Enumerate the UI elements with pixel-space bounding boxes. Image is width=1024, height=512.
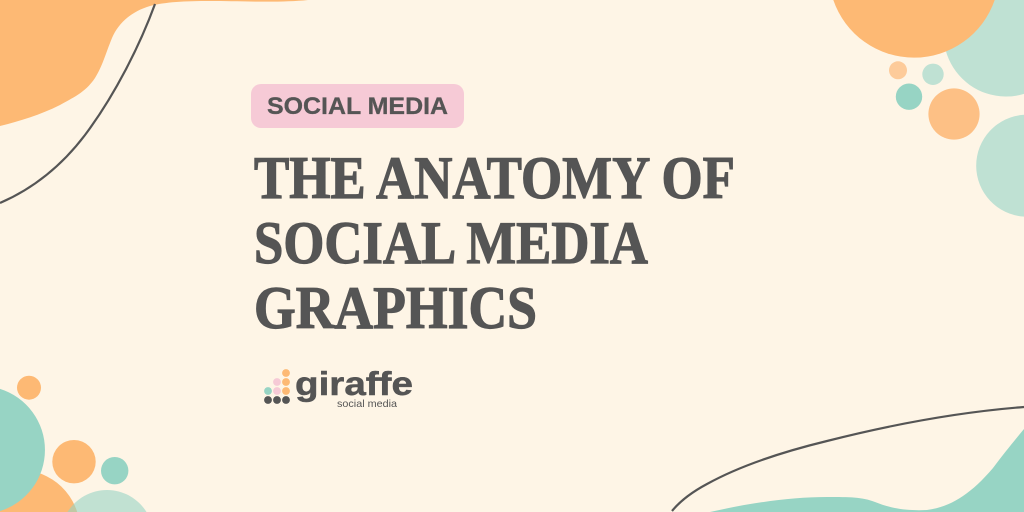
logo tagline: social media xyxy=(337,398,397,410)
bottom-right decoration: teal wave and curve xyxy=(672,407,1024,512)
icon: logo dots xyxy=(264,369,290,404)
title: THE ANATOMY OF xyxy=(254,145,735,211)
title xyxy=(254,145,735,341)
logo: giraffe social media xyxy=(264,365,413,410)
logo wordmark: giraffe xyxy=(295,365,413,402)
title: SOCIAL MEDIA xyxy=(254,210,648,276)
top-right decoration: circles xyxy=(833,0,1024,217)
category tag: social media xyxy=(251,84,464,128)
bottom-left decoration: circles xyxy=(0,376,146,512)
category tag: social media: SOCIAL MEDIA xyxy=(267,93,448,120)
top-left decoration: orange blob and curve xyxy=(0,0,308,203)
title: GRAPHICS xyxy=(254,275,537,341)
